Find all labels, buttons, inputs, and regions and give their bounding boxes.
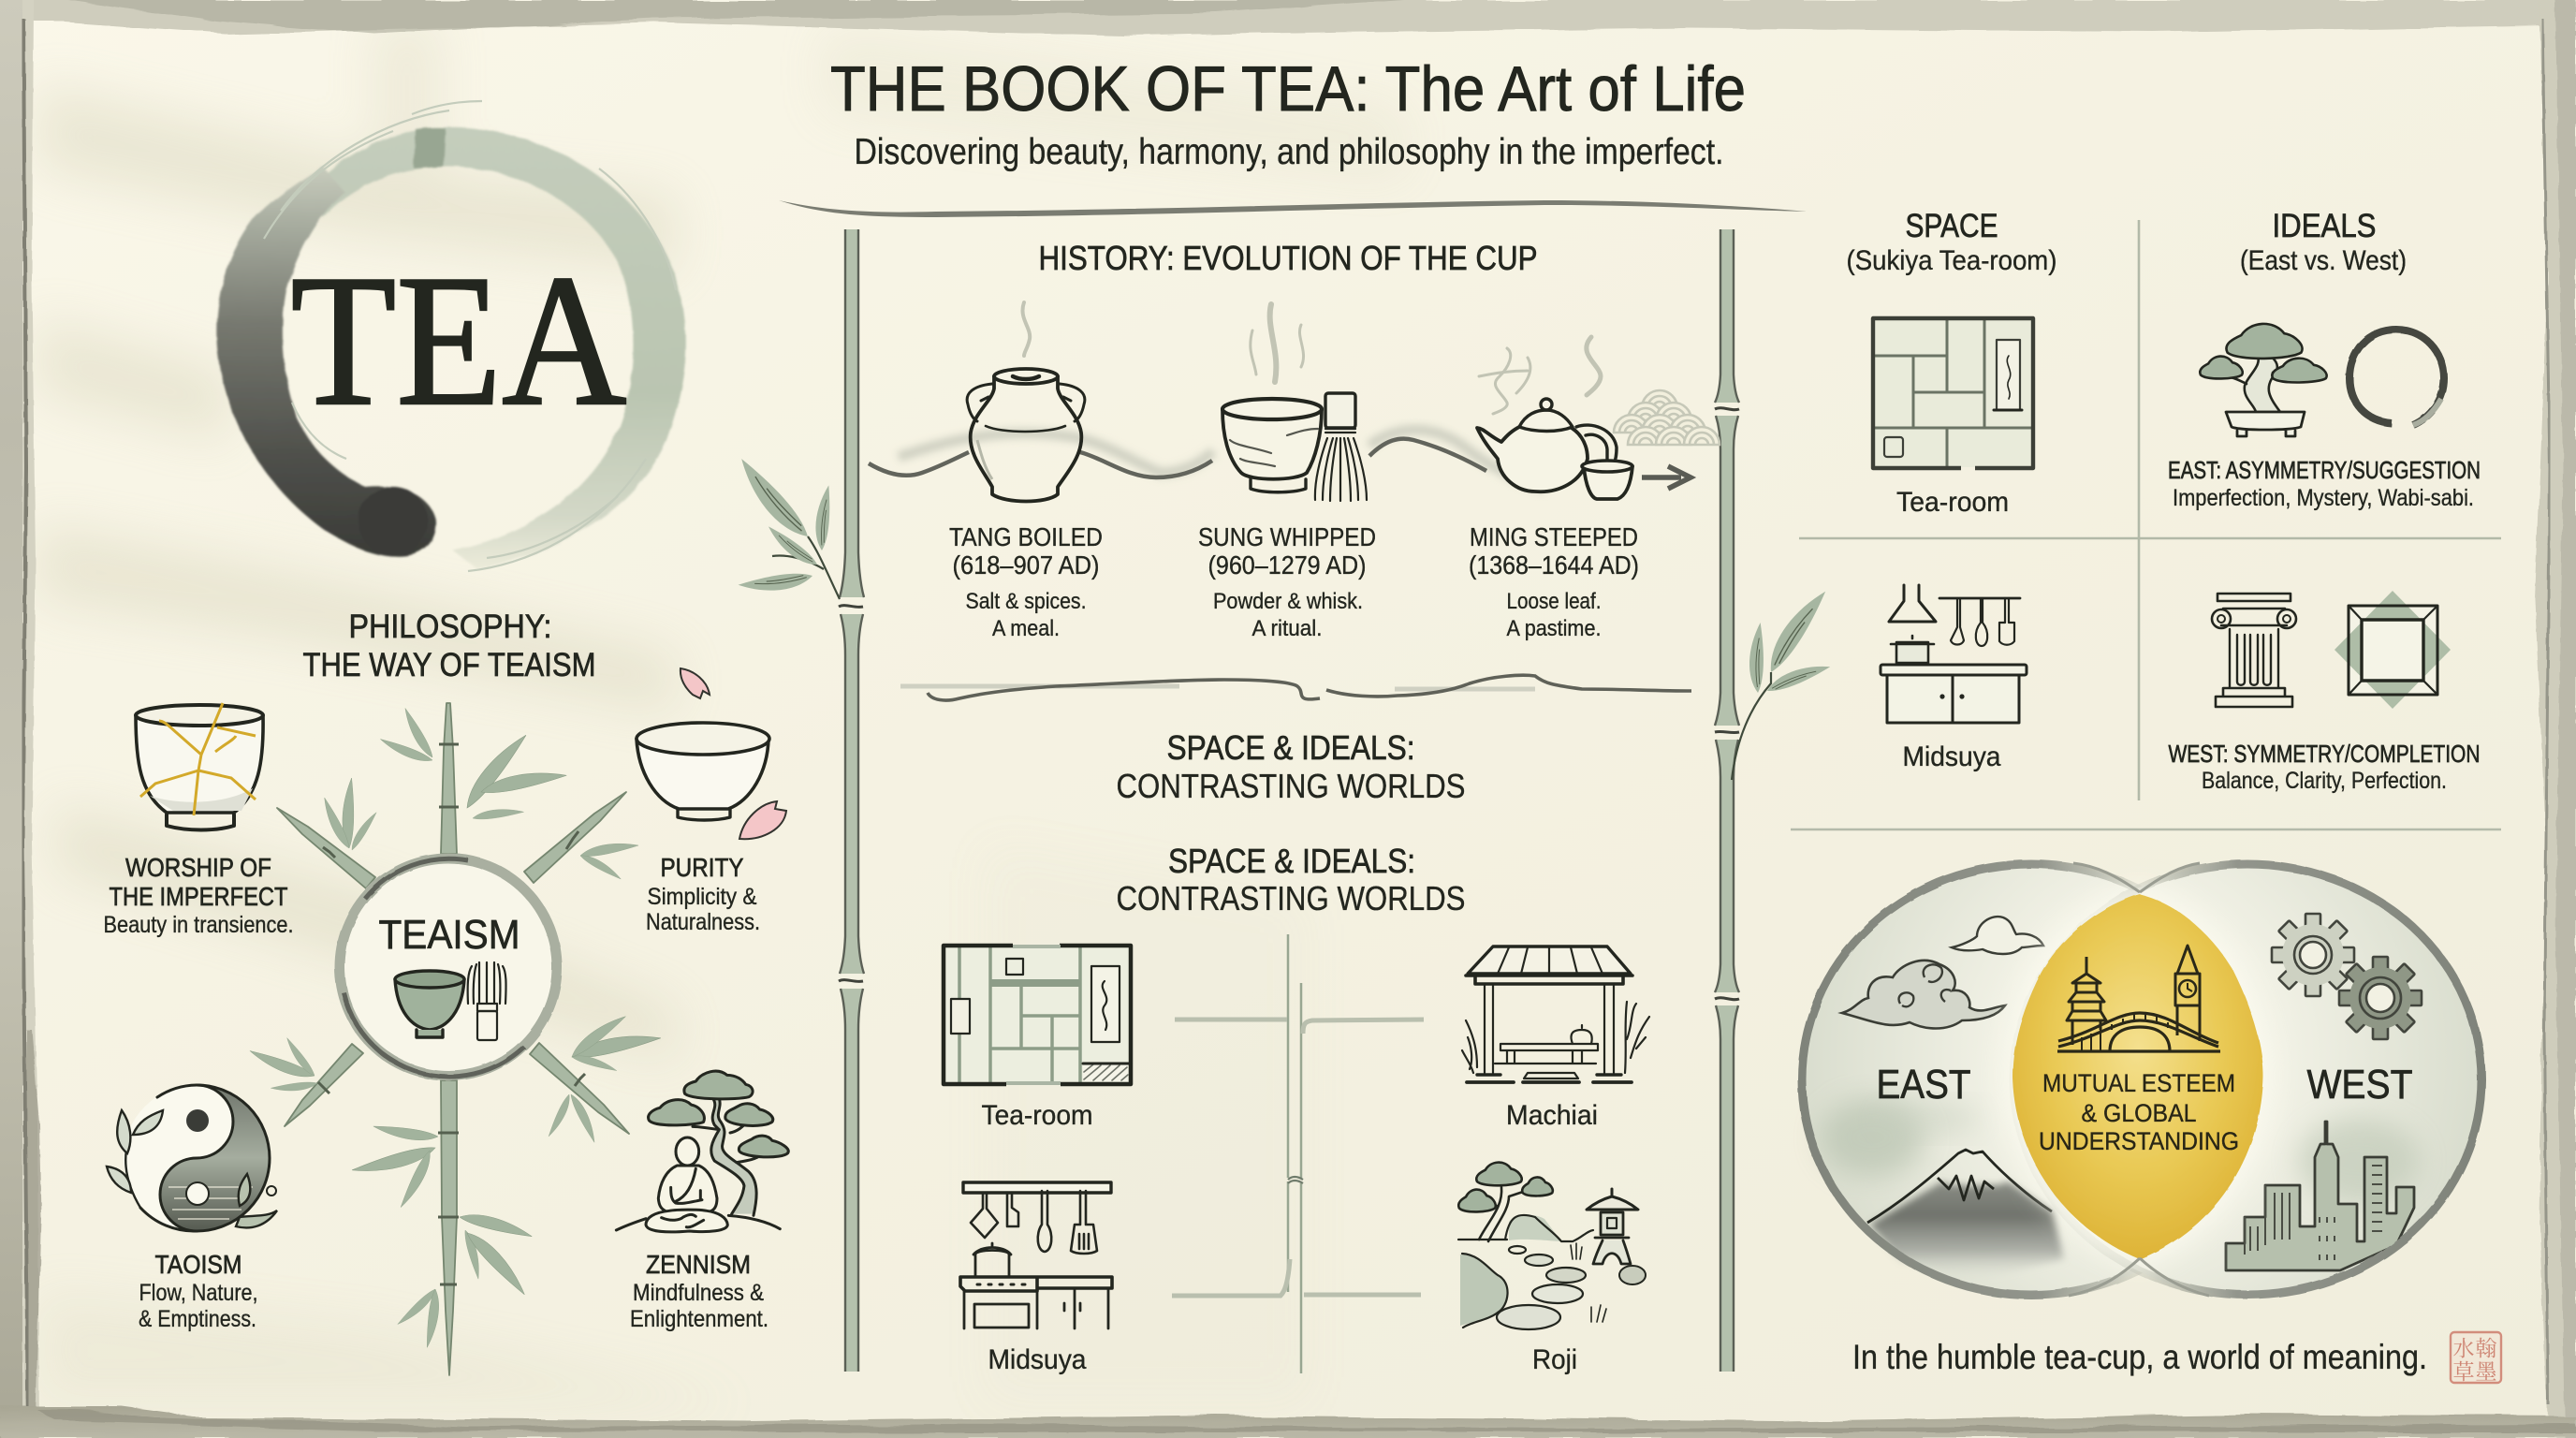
timeline wave — [869, 430, 1544, 489]
era: ming: (1368–1644 AD) — [1469, 550, 1639, 580]
era: tang: A meal. — [992, 616, 1060, 641]
item: worship of the imperfect: WORSHIP OF — [125, 853, 271, 882]
item: worship of the imperfect: THE IMPERFECT — [109, 882, 288, 911]
era: tang — [949, 302, 1103, 641]
room: machiai: Machiai — [1506, 1100, 1598, 1131]
center teaism hub: TEAISM — [378, 912, 520, 958]
ideals: east: Imperfection, Mystery, Wabi-sabi. — [2173, 485, 2474, 511]
item: zennism: Mindfulness & — [633, 1280, 764, 1306]
era: tang: TANG BOILED — [949, 522, 1103, 551]
icon: bonsai — [2200, 324, 2327, 436]
TEA wordmark: TEA — [290, 237, 627, 445]
left circle east — [1801, 863, 2261, 1296]
panel: history — [869, 239, 1720, 641]
center bamboo cross — [1172, 934, 1424, 1373]
item: taoism: Flow, Nature, — [139, 1280, 258, 1306]
ideals: west — [2168, 591, 2481, 794]
mutual esteem label — [2039, 1069, 2239, 1155]
ideals: west: WEST: SYMMETRY/COMPLETION — [2168, 740, 2481, 768]
mutual esteem label: UNDERSTANDING — [2039, 1127, 2239, 1155]
icon: tang vase — [967, 302, 1085, 502]
icon: meditating figure under pine — [616, 1071, 788, 1232]
section heading — [1116, 728, 1466, 805]
icon: seigaiha wave pattern — [1614, 390, 1720, 445]
icon: small cloud — [1952, 917, 2043, 954]
era: ming: MING STEEPED — [1470, 522, 1638, 551]
grid dividers — [1799, 220, 2501, 800]
mutual esteem label: & GLOBAL — [2082, 1099, 2196, 1127]
item: purity: PURITY — [661, 853, 744, 882]
item: zennism: ZENNISM — [646, 1250, 751, 1279]
right circle west — [2012, 863, 2482, 1296]
icon: gears — [2272, 914, 2422, 1039]
icon: city skyline — [2226, 1122, 2414, 1270]
space: midsuya: Midsuya — [1902, 741, 2001, 772]
icon: kintsugi bowl — [136, 703, 263, 829]
era: tang: (618–907 AD) — [953, 550, 1099, 580]
ideals: east — [2168, 324, 2481, 511]
divider: right bamboo — [1715, 229, 1832, 1372]
tagline: In the humble tea-cup, a world of meaning. — [1852, 1338, 2427, 1376]
icon: mount fuji — [1867, 1150, 2052, 1223]
era: sung: (960–1279 AD) — [1208, 550, 1367, 580]
space: midsuya — [1881, 585, 2027, 772]
icon: tea-room plan — [944, 946, 1131, 1084]
ideals heading — [2240, 208, 2407, 276]
icon: roji garden — [1458, 1163, 1646, 1329]
space heading: SPACE — [1906, 208, 1998, 244]
space: tea-room: Tea-room — [1896, 487, 2009, 518]
philosophy heading — [303, 609, 595, 683]
item: worship of the imperfect — [103, 703, 294, 938]
icon: bridge pagoda and clock tower — [2057, 946, 2220, 1051]
red seal: 草 — [2452, 1355, 2475, 1386]
panel: east west venn — [1801, 863, 2482, 1296]
era: sung: Powder & whisk. — [1213, 589, 1363, 614]
icon: matcha bowl and whisk — [395, 962, 506, 1040]
icon: sung bowl and whisk — [1222, 304, 1367, 501]
enso brush ring — [217, 127, 686, 569]
icon: yin yang with leaves — [107, 1085, 277, 1231]
era: ming — [1469, 337, 1720, 641]
room: roji: Roji — [1532, 1344, 1577, 1375]
era: ming: Loose leaf. — [1507, 589, 1601, 614]
room: tea-room plan — [944, 946, 1131, 1131]
title block — [830, 53, 1746, 172]
icon: big cloud — [1842, 961, 2005, 1028]
philosophy heading: THE WAY OF TEAISM — [303, 647, 595, 683]
space heading — [1846, 208, 2057, 276]
icon: small enso — [2349, 330, 2444, 425]
east label: EAST — [1876, 1062, 1971, 1108]
icon: sukiya floor plan — [1873, 318, 2033, 468]
west label: WEST — [2306, 1062, 2413, 1108]
bamboo spokes — [247, 703, 662, 1375]
era: sung: A ritual. — [1252, 616, 1322, 641]
ideals: west: Balance, Clarity, Perfection. — [2202, 768, 2447, 794]
brush rule above venn — [1791, 829, 2501, 830]
item: zennism: Enlightenment. — [630, 1306, 768, 1332]
panel: TEA enso — [217, 101, 686, 571]
section heading repeat — [1116, 842, 1466, 917]
window light shadows — [37, 19, 1404, 1404]
panel: space and ideals center — [944, 728, 1649, 1375]
title: THE BOOK OF TEA: The Art of Life — [830, 53, 1746, 125]
item: zennism — [616, 1071, 788, 1332]
room: midsuya: Midsuya — [988, 1344, 1087, 1375]
red seal — [2451, 1331, 2501, 1386]
brush rule under history — [900, 675, 1691, 700]
icon: framed square on diamond — [2334, 591, 2451, 709]
center teaism hub — [338, 857, 559, 1078]
item: purity: Simplicity & — [648, 884, 757, 910]
icon: right midsuya kitchen — [1881, 585, 2027, 723]
red seal: 墨 — [2475, 1355, 2497, 1386]
history heading: HISTORY: EVOLUTION OF THE CUP — [1039, 239, 1537, 277]
item: worship of the imperfect: Beauty in transience. — [103, 912, 294, 938]
ideals: east: EAST: ASYMMETRY/SUGGESTION — [2168, 456, 2481, 484]
divider: left bamboo — [731, 229, 864, 1372]
space: tea-room — [1873, 318, 2033, 518]
subtitle: Discovering beauty, harmony, and philosophy in the imperfect. — [854, 132, 1724, 172]
section heading: CONTRASTING WORLDS — [1116, 767, 1466, 805]
room: tea-room plan: Tea-room — [981, 1100, 1093, 1131]
section heading: SPACE & IDEALS: — [1166, 728, 1415, 767]
icon: white bowl with petals — [637, 668, 786, 839]
panel: philosophy — [103, 609, 788, 1375]
space heading: (Sukiya Tea-room) — [1846, 245, 2057, 276]
era: sung — [1198, 304, 1376, 641]
item: taoism: & Emptiness. — [139, 1306, 256, 1332]
room: midsuya — [960, 1182, 1112, 1375]
section heading repeat: SPACE & IDEALS: — [1168, 842, 1415, 880]
red seal: 翰 — [2475, 1331, 2497, 1362]
center gold lens — [2003, 863, 2273, 1296]
era: tang: Salt & spices. — [966, 589, 1086, 614]
icon: midsuya kitchen — [960, 1182, 1112, 1328]
icon: machiai shelter — [1462, 946, 1649, 1082]
arrow — [1642, 466, 1690, 489]
ideals heading: (East vs. West) — [2240, 245, 2407, 276]
philosophy heading: PHILOSOPHY: — [348, 609, 552, 645]
item: purity: Naturalness. — [646, 909, 760, 935]
icon: ionic column — [2212, 594, 2296, 707]
item: taoism — [107, 1085, 277, 1332]
section heading repeat: CONTRASTING WORLDS — [1116, 879, 1466, 917]
item: purity — [637, 668, 786, 935]
item: taoism: TAOISM — [155, 1250, 242, 1279]
era: ming: A pastime. — [1507, 616, 1601, 641]
era: sung: SUNG WHIPPED — [1198, 522, 1376, 551]
brush rule under title — [779, 200, 1807, 217]
ideals heading: IDEALS — [2273, 208, 2376, 244]
mutual esteem label: MUTUAL ESTEEM — [2042, 1069, 2235, 1097]
room: machiai — [1462, 946, 1649, 1131]
room: roji — [1458, 1163, 1646, 1375]
panel: space and ideals right — [1799, 208, 2501, 800]
icon: ming teapot and cup — [1477, 337, 1632, 499]
red seal: 水 — [2452, 1331, 2475, 1362]
